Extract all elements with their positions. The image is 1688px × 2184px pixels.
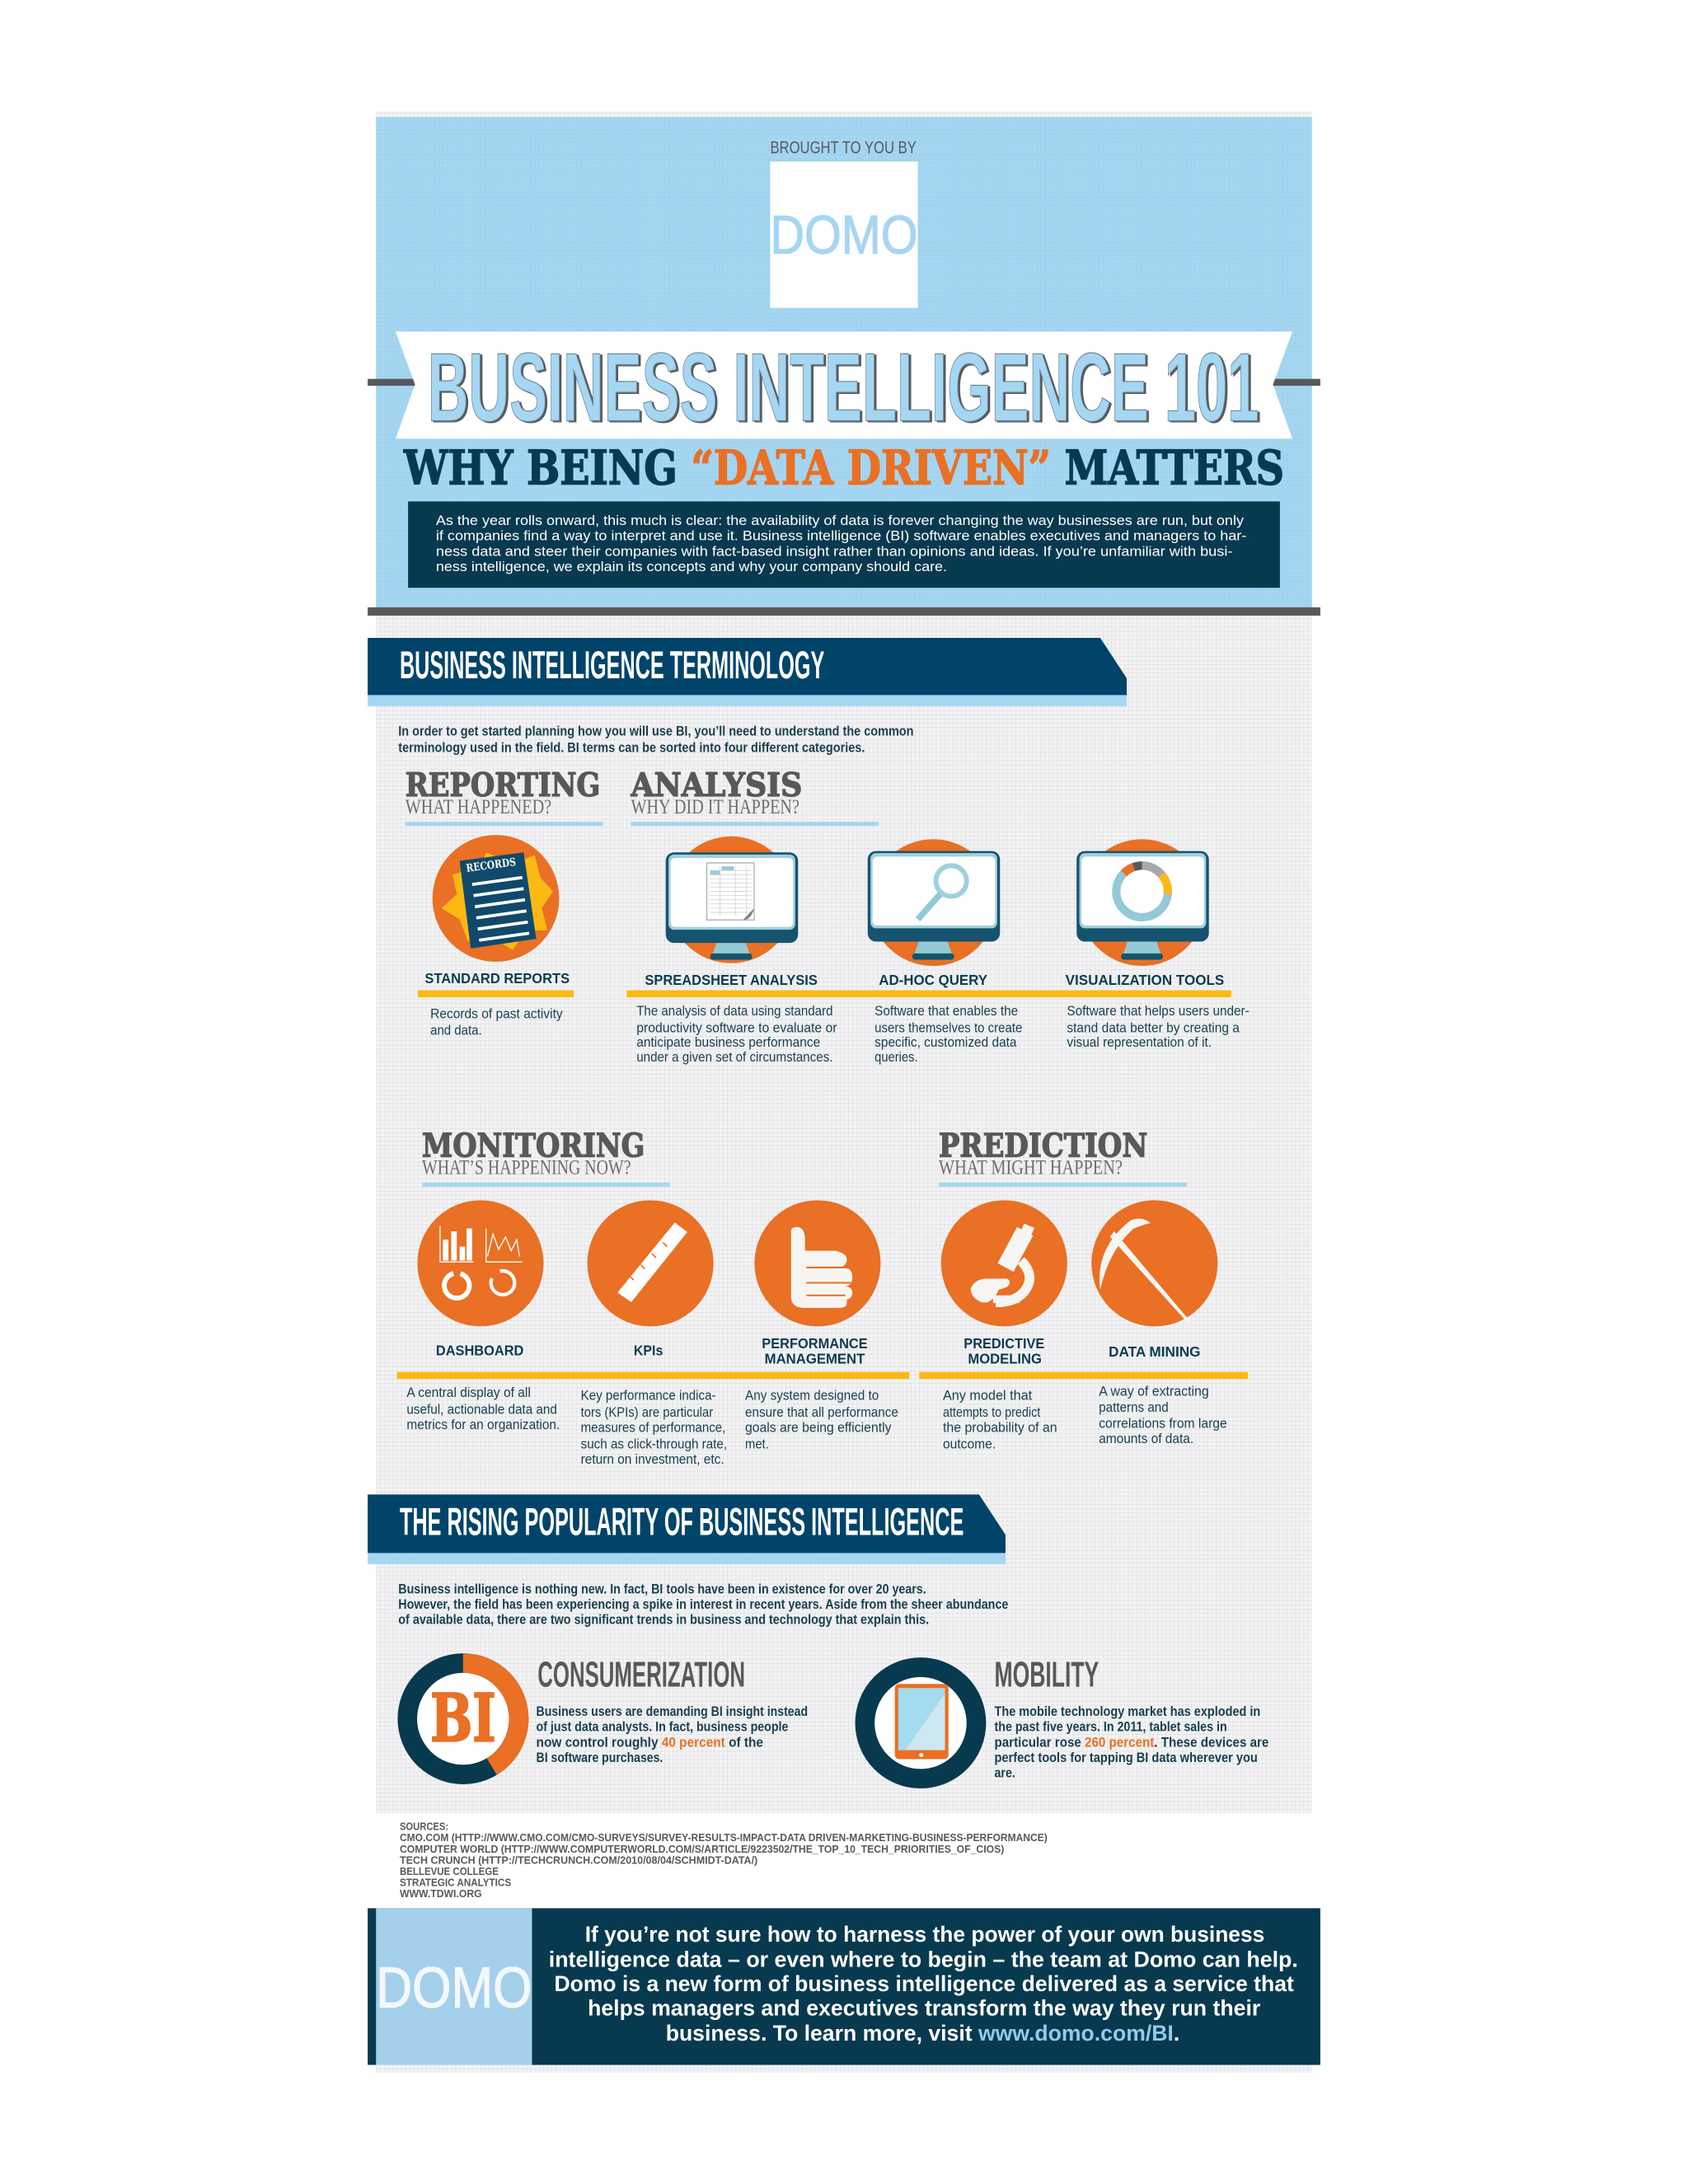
yellow rule: analysis (626, 991, 1231, 997)
intro box: ness data and steer their companies with fact-based insight rather than opinions and ideas. If you’re unfamiliar with busi- (436, 543, 1232, 559)
text: ad-hoc: specific, customized data (874, 1035, 1017, 1050)
intro box: if companies find a way to interpret and use it. Business intelligence (BI) software enables executives and managers to har- (436, 528, 1246, 544)
icon: spreadsheet monitor (666, 837, 798, 963)
label: dashboard: DASHBOARD (436, 1342, 523, 1358)
heading: analysis: WHY DID IT HAPPEN? (631, 795, 799, 818)
text: ad-hoc (874, 1004, 1022, 1065)
text: spreadsheet (636, 1004, 837, 1065)
text: dashboard: A central display of all (406, 1385, 531, 1400)
label: data mining: DATA MINING (1109, 1343, 1201, 1360)
yellow rule: monitoring (397, 1372, 909, 1379)
heading: consumerization: CONSUMERIZATION (537, 1655, 745, 1695)
section header: rising popularity (368, 1494, 1006, 1564)
icon: BI ring: BI (430, 1680, 496, 1757)
footer banner (368, 1908, 1320, 2065)
section header: terminology (368, 638, 1127, 706)
heading: monitoring: WHAT’S HAPPENING NOW? (422, 1156, 631, 1179)
heading: monitoring (422, 1128, 670, 1187)
text: mobility: The mobile technology market has exploded in (994, 1704, 1260, 1719)
text: kpis: return on investment, etc. (581, 1452, 724, 1467)
text: visualization (1067, 1004, 1250, 1050)
icon: ruler (588, 1200, 714, 1326)
text: performance (745, 1389, 898, 1452)
footer message: intelligence data – or even where to begin – the team at Domo can help. (549, 1947, 1298, 1971)
footer grid strip (376, 2061, 1312, 2073)
footer logo: DOMO (376, 1955, 532, 2019)
heading: prediction: PREDICTION (939, 1128, 1147, 1165)
text: kpis: Key performance indica- (581, 1389, 716, 1404)
text: data mining: patterns and (1099, 1400, 1169, 1415)
text: data mining: A way of extracting (1099, 1384, 1209, 1399)
sources: TECH CRUNCH (HTTP://TECHCRUNCH.COM/2010/08/04/SCHMIDT-DATA/) (400, 1854, 757, 1866)
text: spreadsheet: under a given set of circumstances. (636, 1050, 832, 1065)
footer message (549, 1922, 1298, 2046)
heading: monitoring: MONITORING (422, 1128, 645, 1165)
icon: donut monitor (1076, 839, 1209, 966)
Domo logo (770, 162, 918, 308)
footer message: If you’re not sure how to harness the power of your own business (585, 1922, 1264, 1947)
text: predictive: attempts to predict (943, 1405, 1041, 1420)
text: spreadsheet: productivity software to evaluate or (636, 1020, 837, 1035)
icon: standard reports: RECORDS (466, 856, 517, 875)
heading: prediction (939, 1128, 1187, 1187)
text: ad-hoc: Software that enables the (874, 1004, 1018, 1019)
sources: STRATEGIC ANALYTICS (400, 1877, 511, 1888)
text: dashboard (406, 1385, 560, 1432)
text: mobility: perfect tools for tapping BI data wherever you (994, 1750, 1258, 1765)
text: visualization: stand data better by creating a (1067, 1020, 1240, 1035)
popularity intro: of available data, there are two significant trends in business and technology that explain this. (398, 1613, 929, 1628)
icon: tablet ring (856, 1657, 986, 1788)
text: ad-hoc: queries. (874, 1050, 918, 1065)
label: predictive modeling (964, 1335, 1044, 1367)
text: mobility: particular rose 260 percent. These devices are (994, 1735, 1268, 1750)
yellow rule: reporting (418, 991, 574, 997)
grid background panel (376, 111, 1312, 1813)
popularity intro (398, 1582, 1008, 1628)
sources: SOURCES: (400, 1821, 448, 1833)
text: spreadsheet: anticipate business performance (636, 1035, 820, 1050)
header panel (368, 117, 1320, 607)
text: consumerization: Business users are demanding BI insight instead (537, 1704, 808, 1719)
header bottom bar (368, 607, 1320, 616)
footer message: Domo is a new form of business intelligence delivered as a service that (555, 1971, 1294, 1996)
text: kpis: such as click-through rate, (581, 1437, 727, 1452)
label: standard reports: STANDARD REPORTS (424, 970, 570, 987)
icon: thumbs up (754, 1200, 880, 1326)
text: kpis (581, 1389, 727, 1467)
heading: reporting (406, 767, 603, 826)
popularity intro: Business intelligence is nothing new. In fact, BI tools have been in existence for over 20 years. (398, 1582, 926, 1596)
text: kpis: tors (KPIs) are particular (581, 1405, 714, 1420)
sources: CMO.COM (HTTP://WWW.CMO.COM/CMO-SURVEYS/SURVEY-RESULTS-IMPACT-DATA DRIVEN-MARKETING-BUSINESS-PERFORMANCE) (400, 1832, 1048, 1844)
sources (400, 1821, 1048, 1900)
footer logo (376, 1908, 532, 2065)
text: data mining: amounts of data. (1099, 1432, 1193, 1446)
text: mobility (994, 1704, 1268, 1781)
label: spreadsheet analysis: SPREADSHEET ANALYSIS (645, 972, 818, 988)
text: standard reports: and data. (430, 1024, 482, 1038)
heading: reporting: REPORTING (406, 767, 600, 804)
label: performance management: MANAGEMENT (765, 1351, 865, 1367)
text: ad-hoc: users themselves to create (874, 1020, 1022, 1035)
heading: analysis: ANALYSIS (631, 767, 802, 804)
text: performance: ensure that all performance (745, 1405, 898, 1420)
label: predictive modeling: MODELING (968, 1351, 1042, 1367)
icon: pickaxe (1091, 1200, 1217, 1326)
intro box: As the year rolls onward, this much is clear: the availability of data is forever changing the way businesses are run, but only (436, 513, 1245, 528)
text: consumerization (537, 1704, 808, 1765)
heading: analysis (631, 767, 879, 826)
text: visualization: visual representation of it. (1067, 1035, 1212, 1050)
terminology intro: In order to get started planning how you will use BI, you’ll need to understand the common (398, 724, 913, 738)
heading: prediction: WHAT MIGHT HAPPEN? (939, 1156, 1123, 1179)
text: data mining: correlations from large (1099, 1416, 1227, 1431)
text: consumerization: BI software purchases. (537, 1750, 663, 1765)
intro box: ness intelligence, we explain its concepts and why your company should care. (436, 559, 947, 574)
icon: microscope (941, 1200, 1067, 1326)
icon: dashboard (417, 1200, 544, 1326)
yellow rule: prediction (919, 1372, 1248, 1379)
text: consumerization: now control roughly 40 percent of the (537, 1735, 763, 1750)
popularity intro: However, the field has been experiencing a spike in interest in recent years. Aside from the sheer abundance (398, 1597, 1008, 1612)
text: mobility: the past five years. In 2011, tablet sales in (994, 1720, 1227, 1735)
text: predictive: Any model that (943, 1389, 1033, 1404)
text: dashboard: metrics for an organization. (406, 1418, 560, 1432)
label: kpis: KPIs (634, 1342, 663, 1358)
sources: COMPUTER WORLD (HTTP://WWW.COMPUTERWORLD.COM/S/ARTICLE/9223502/THE_TOP_10_TECH_PRIORITIES_OF_CIOS) (400, 1844, 1004, 1855)
text: consumerization: of just data analysts. In fact, business people (537, 1720, 788, 1735)
intro box (408, 501, 1280, 588)
text: data mining (1099, 1384, 1227, 1446)
Domo logo: DOMO (770, 204, 918, 265)
sources: WWW.TDWI.ORG (400, 1888, 482, 1900)
section header: terminology: BUSINESS INTELLIGENCE TERMINOLOGY (400, 644, 824, 687)
text: standard reports: Records of past activity (430, 1006, 564, 1021)
ribbon connectors (368, 379, 1320, 386)
brought to you by: BROUGHT TO YOU BY (770, 138, 917, 157)
icon: magnifier monitor (868, 839, 1000, 966)
text: predictive: outcome. (943, 1437, 996, 1452)
subtitle: WHY BEING “DATA DRIVEN” MATTERS (403, 439, 1284, 495)
terminology intro (398, 724, 913, 756)
heading: reporting: WHAT HAPPENED? (406, 795, 551, 818)
text: mobility: are. (994, 1766, 1015, 1781)
title ribbon (396, 331, 1292, 438)
heading: mobility: MOBILITY (994, 1655, 1099, 1695)
text: kpis: measures of performance, (581, 1420, 725, 1435)
text: predictive: the probability of an (943, 1420, 1057, 1435)
text: visualization: Software that helps users under- (1067, 1004, 1250, 1019)
sources: BELLEVUE COLLEGE (400, 1866, 499, 1877)
footer message: business. To learn more, visit www.domo.com/BI. (666, 2021, 1179, 2046)
label: performance management (762, 1335, 868, 1367)
text: performance: Any system designed to (745, 1389, 879, 1404)
terminology intro: terminology used in the field. BI terms can be sorted into four different categories. (398, 741, 865, 756)
label: ad-hoc query: AD-HOC QUERY (879, 972, 987, 988)
text: performance: goals are being efficiently (745, 1420, 892, 1435)
footer message: helps managers and executives transform the way they run their (588, 1996, 1260, 2021)
text: dashboard: useful, actionable data and (406, 1402, 557, 1417)
main title (428, 333, 1261, 443)
text: spreadsheet: The analysis of data using standard (636, 1004, 832, 1019)
text: performance: met. (745, 1437, 769, 1452)
label: predictive modeling: PREDICTIVE (964, 1335, 1044, 1352)
section header: rising popularity: THE RISING POPULARITY OF BUSINESS INTELLIGENCE (400, 1500, 964, 1544)
text: predictive (943, 1389, 1057, 1452)
icon: standard reports (433, 835, 559, 962)
icon: BI ring (397, 1653, 528, 1784)
text: standard reports (430, 1006, 564, 1038)
label: performance management: PERFORMANCE (762, 1335, 868, 1352)
label: visualization tools: VISUALIZATION TOOLS (1066, 972, 1224, 988)
